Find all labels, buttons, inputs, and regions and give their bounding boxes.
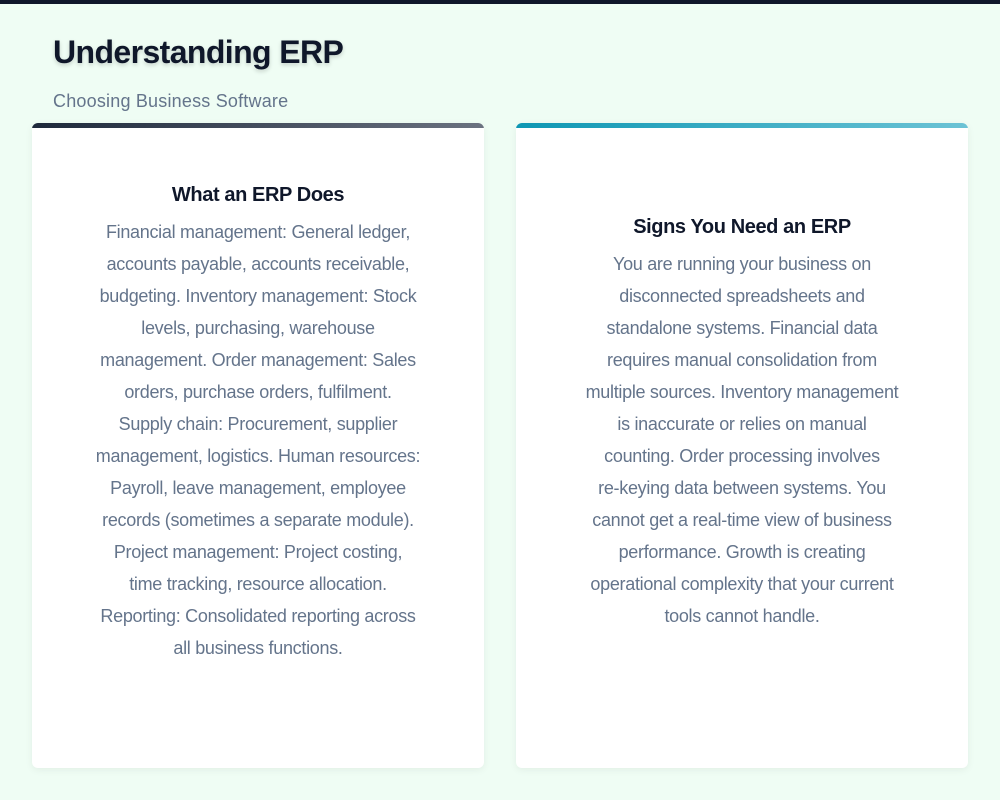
panel: what an ERP does xyxy=(32,123,484,768)
text: signs: tools cannot handle. xyxy=(664,606,820,626)
text: signs: multiple sources. Inventory management xyxy=(586,382,898,402)
text: ERP functions: levels, purchasing, warehouse xyxy=(141,318,375,338)
text: signs: requires manual consolidation from xyxy=(607,350,877,370)
text: signs: standalone systems. Financial data xyxy=(607,318,877,338)
text: signs: counting. Order processing involves xyxy=(604,446,880,466)
text: ERP functions: management. Order management: Sales xyxy=(100,350,416,370)
panel: signs you need an ERP xyxy=(516,123,968,768)
text: signs: re-keying data between systems. You xyxy=(598,478,886,498)
text: signs: operational complexity that your current xyxy=(590,574,894,594)
text: ERP functions: Reporting: Consolidated reporting across xyxy=(100,606,416,626)
text: signs xyxy=(586,254,898,626)
heading: what an ERP does: What an ERP Does xyxy=(172,184,344,206)
text: ERP functions: all business functions. xyxy=(173,638,343,658)
text: ERP functions: Supply chain: Procurement, supplier xyxy=(119,414,397,434)
text: ERP functions: orders, purchase orders, fulfilment. xyxy=(124,382,392,402)
text: signs: is inaccurate or relies on manual xyxy=(617,414,867,434)
text: ERP functions xyxy=(96,222,420,658)
text: signs: You are running your business on xyxy=(613,254,871,274)
text: signs: performance. Growth is creating xyxy=(619,542,865,562)
text: ERP functions: accounts payable, accounts receivable, xyxy=(107,254,409,274)
heading: signs you need an ERP: Signs You Need an ERP xyxy=(633,216,851,238)
text: ERP functions: budgeting. Inventory management: Stock xyxy=(100,286,416,306)
text: ERP functions: management, logistics. Human resources: xyxy=(96,446,420,466)
subtitle: Choosing Business Software xyxy=(53,91,288,111)
text: ERP functions: Payroll, leave management, employee xyxy=(110,478,406,498)
title: Understanding ERP xyxy=(53,34,343,70)
text: signs: cannot get a real-time view of business xyxy=(592,510,892,530)
text: ERP functions: time tracking, resource allocation. xyxy=(129,574,387,594)
text: signs: disconnected spreadsheets and xyxy=(619,286,865,306)
text: ERP functions: Financial management: General ledger, xyxy=(106,222,410,242)
text: ERP functions: records (sometimes a separate module). xyxy=(102,510,414,530)
text: ERP functions: Project management: Project costing, xyxy=(114,542,402,562)
